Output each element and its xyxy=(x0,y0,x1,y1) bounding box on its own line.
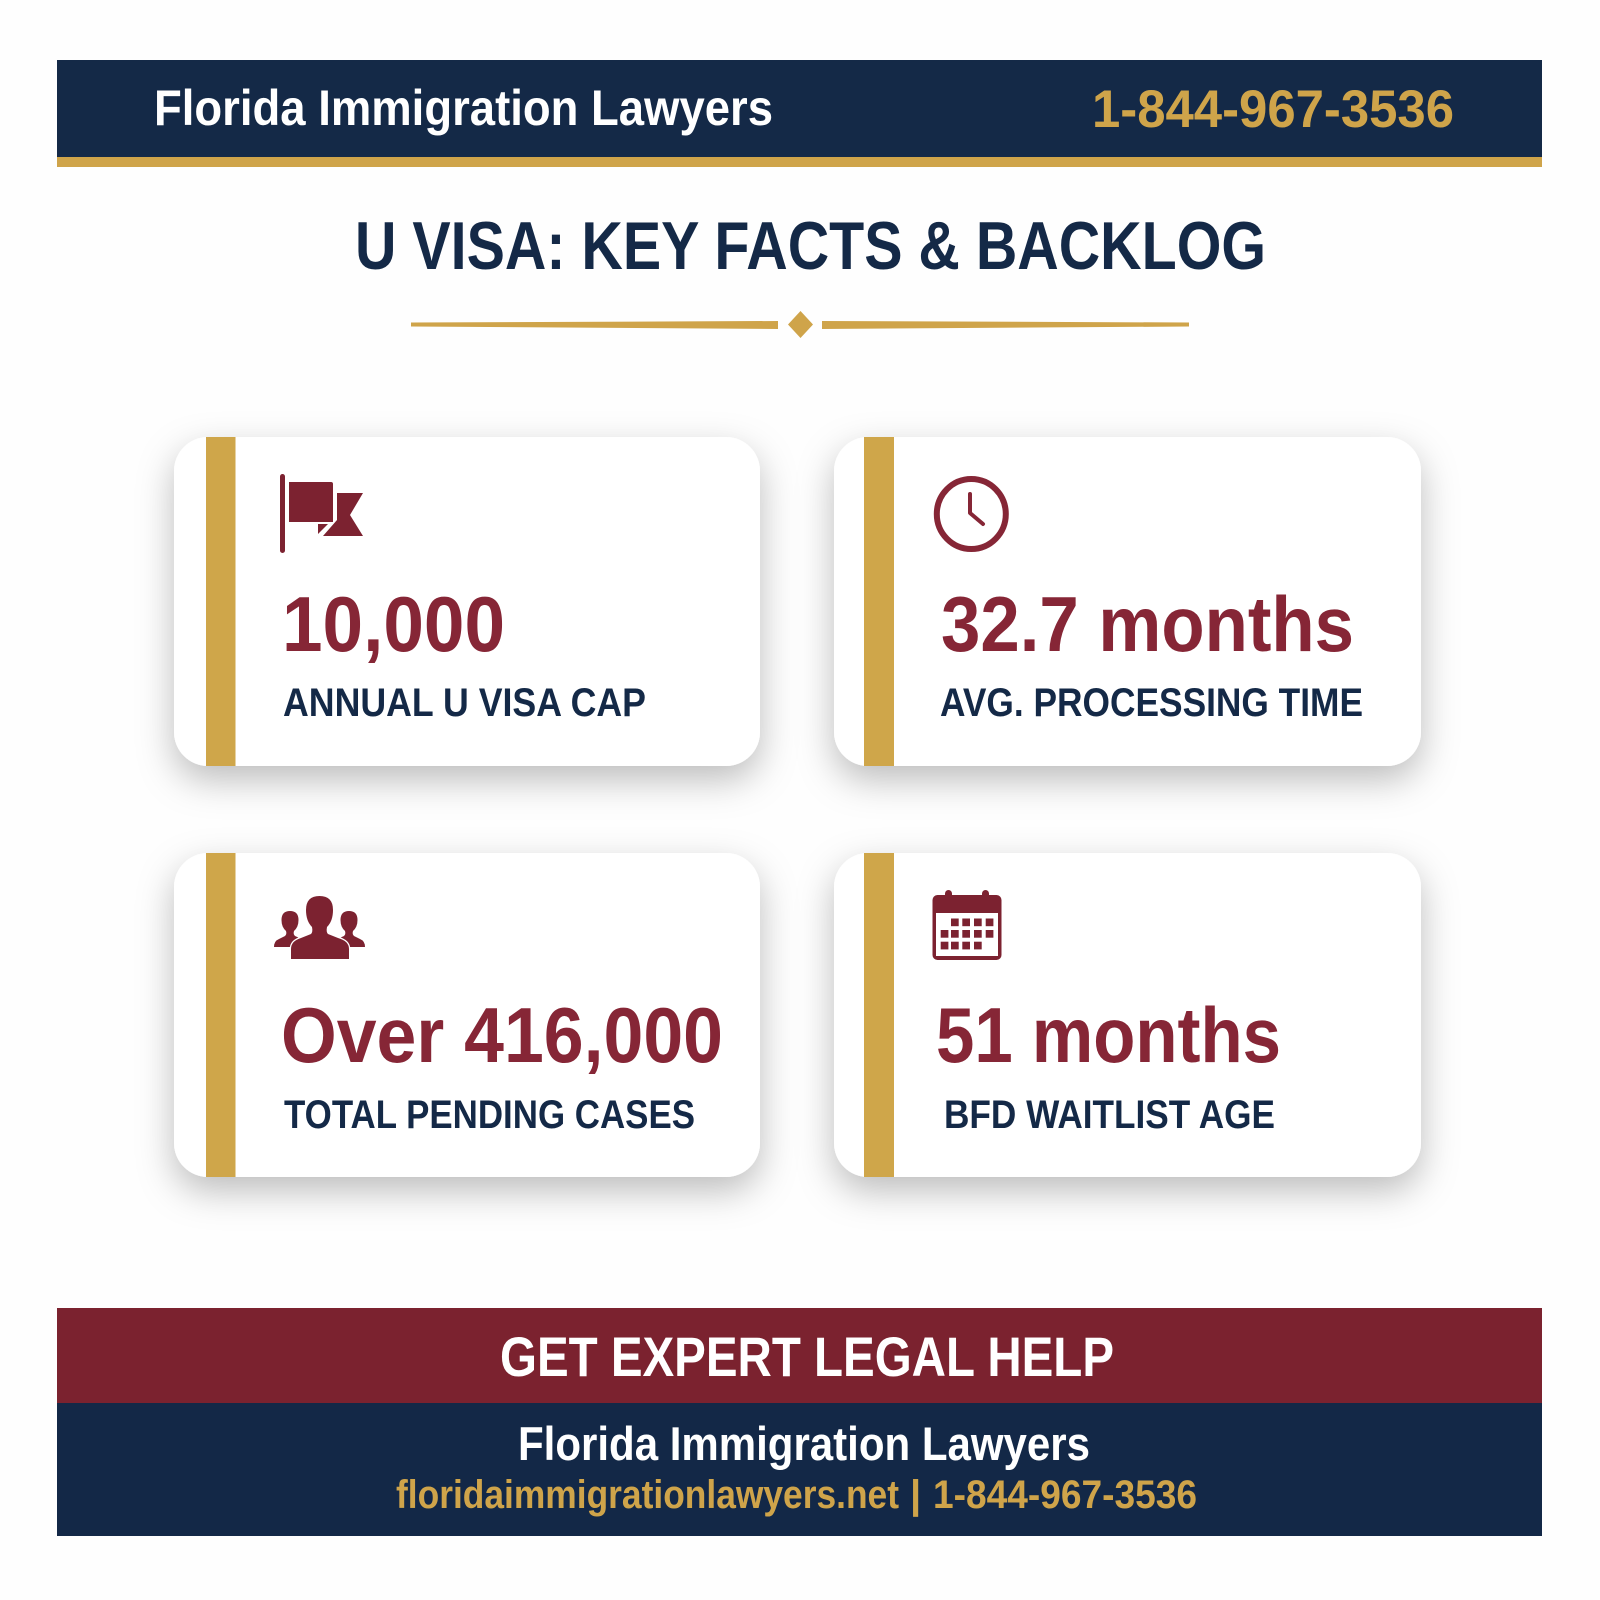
stat label: BFD WAITLIST AGE xyxy=(944,1093,1275,1137)
title divider with diamond xyxy=(411,311,1189,338)
stat label: TOTAL PENDING CASES xyxy=(284,1093,695,1137)
panel: waitlist age xyxy=(834,853,1421,1177)
icon: clock xyxy=(937,479,1006,549)
firm name: Florida Immigration Lawyers xyxy=(154,80,773,136)
footer contact banner xyxy=(57,1403,1542,1536)
panel: annual cap xyxy=(174,437,760,766)
footer firm name: Florida Immigration Lawyers xyxy=(518,1417,1090,1470)
stat value: 32.7 months xyxy=(941,580,1354,668)
footer website and phone: 1-844-967-3536 xyxy=(933,1473,1197,1517)
stat label: ANNUAL U VISA CAP xyxy=(283,681,646,725)
call to action banner xyxy=(57,1308,1542,1403)
stat value: Over 416,000 xyxy=(281,991,723,1079)
stat label: AVG. PROCESSING TIME xyxy=(940,681,1363,725)
icon: people xyxy=(274,896,365,959)
title: U VISA: KEY FACTS & BACKLOG xyxy=(355,208,1266,284)
stat value: 10,000 xyxy=(282,580,505,668)
panel: pending cases xyxy=(174,853,760,1177)
call to action text: GET EXPERT LEGAL HELP xyxy=(500,1325,1114,1388)
icon: calendar xyxy=(932,890,1002,960)
footer website and phone: floridaimmigrationlawyers.net xyxy=(396,1473,899,1517)
icon: flags xyxy=(280,474,363,553)
phone number: 1-844-967-3536 xyxy=(1092,80,1454,139)
stat value: 51 months xyxy=(936,991,1281,1079)
panel: processing time xyxy=(834,437,1421,766)
header banner xyxy=(57,60,1542,167)
footer website and phone: | xyxy=(910,1473,921,1517)
